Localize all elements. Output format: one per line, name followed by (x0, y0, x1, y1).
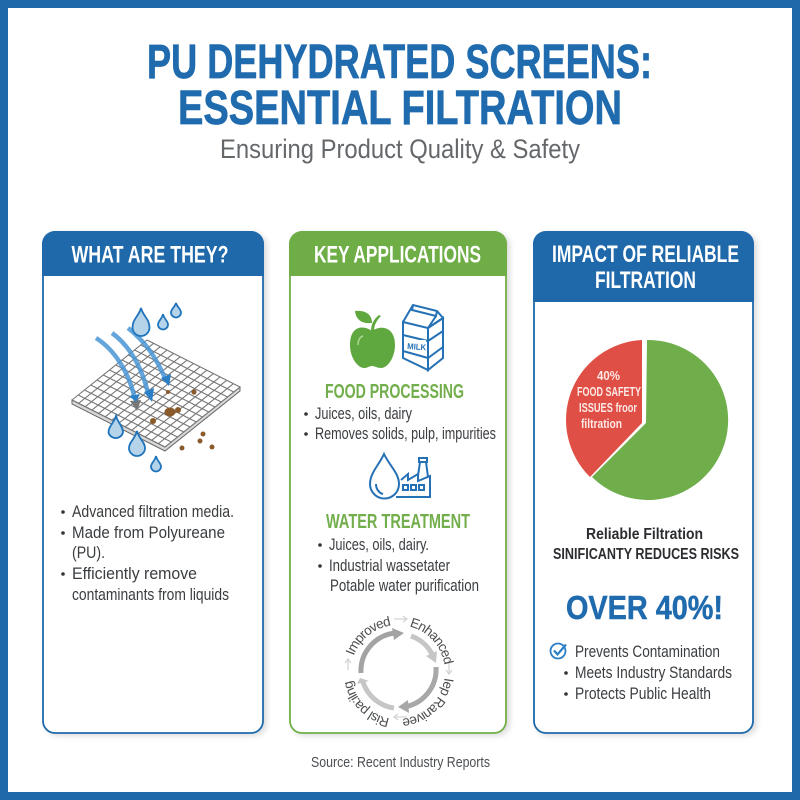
text block: definition (61, 503, 234, 604)
pie label: ISSUES froor (579, 400, 637, 415)
text block: benefits (564, 643, 732, 703)
cycle labels (344, 616, 454, 728)
text block: definition: Advanced filtration media. (72, 503, 234, 521)
text block: food bullets (304, 405, 496, 443)
text block: benefits: Prevents Contamination (575, 643, 720, 661)
text block: definition: contaminants from liquids (72, 586, 229, 604)
cycle arrows (357, 628, 437, 713)
arrows: flow through mesh (96, 328, 165, 395)
thin outer arrows (345, 616, 452, 720)
icon: water drop and factory (370, 454, 430, 498)
icon: apple (350, 311, 395, 368)
droplets (108, 303, 181, 472)
big stat: OVER 40%! (566, 589, 723, 626)
cycle labels: Improved (346, 616, 390, 655)
arrowheads (129, 374, 171, 411)
header: impact: FILTRATION (595, 267, 696, 294)
cycle labels: Iep Ranivee (402, 678, 454, 726)
source note: Source: Recent Industry Reports (311, 754, 490, 771)
title: PU DEHYDRATED SCREENS: (147, 36, 652, 89)
cycle labels: Risl pa:ilng (344, 681, 389, 728)
text block: definition: Efficiently remove (72, 565, 197, 583)
text block: benefits: Protects Public Health (575, 685, 711, 703)
icon: milk carton (403, 305, 443, 370)
text block: food bullets: Juices, oils, dairy (315, 405, 413, 423)
subtitle: Ensuring Product Quality & Safety (220, 134, 580, 164)
text block: water bullets: Industrial wassetater (329, 557, 450, 575)
particles (150, 389, 214, 450)
panel: what are they (42, 231, 264, 733)
text block: risk reduction: SINIFICANTY REDUCES RISKS (553, 546, 739, 563)
cycle labels: Enhanced (410, 618, 454, 664)
pie label: filtration (581, 416, 622, 431)
text block: risk reduction: Reliable Filtration (586, 526, 703, 543)
text block: water bullets: Juices, oils, dairy. (329, 536, 429, 554)
heading: water treatment: WATER TREATMENT (326, 511, 470, 533)
panel: key applications (289, 231, 512, 738)
pie label: FOOD SAFETY (577, 384, 641, 399)
text block: benefits: Meets Industry Standards (575, 664, 732, 682)
header: key applications (289, 231, 507, 276)
text block: definition: Made from Polyureane (72, 524, 225, 542)
text block: risk reduction (553, 526, 739, 563)
diagram: improvement cycle (344, 616, 454, 728)
icon: filter mesh with droplets and particles (72, 303, 240, 472)
text block: water bullets: Potable water purification (330, 577, 479, 595)
header: what are they: WHAT ARE THEY? (72, 242, 228, 268)
icon: check mark (550, 644, 566, 658)
text block: definition: (PU). (72, 544, 105, 562)
icon: milk carton: MILK (407, 341, 427, 352)
pie label: 40% (597, 368, 620, 383)
title (147, 36, 652, 135)
heading: food processing: FOOD PROCESSING (325, 381, 464, 403)
pie label (577, 368, 641, 431)
panel: impact of reliable filtration (533, 231, 754, 733)
header: impact (533, 231, 754, 302)
pie chart: 40 percent food safety issues (566, 340, 728, 500)
title: ESSENTIAL FILTRATION (178, 82, 622, 135)
header: what are they (42, 231, 264, 276)
text block: food bullets: Removes solids, pulp, impurities (315, 425, 496, 443)
header: key applications: KEY APPLICATIONS (314, 242, 481, 268)
text block: water bullets (318, 536, 479, 595)
